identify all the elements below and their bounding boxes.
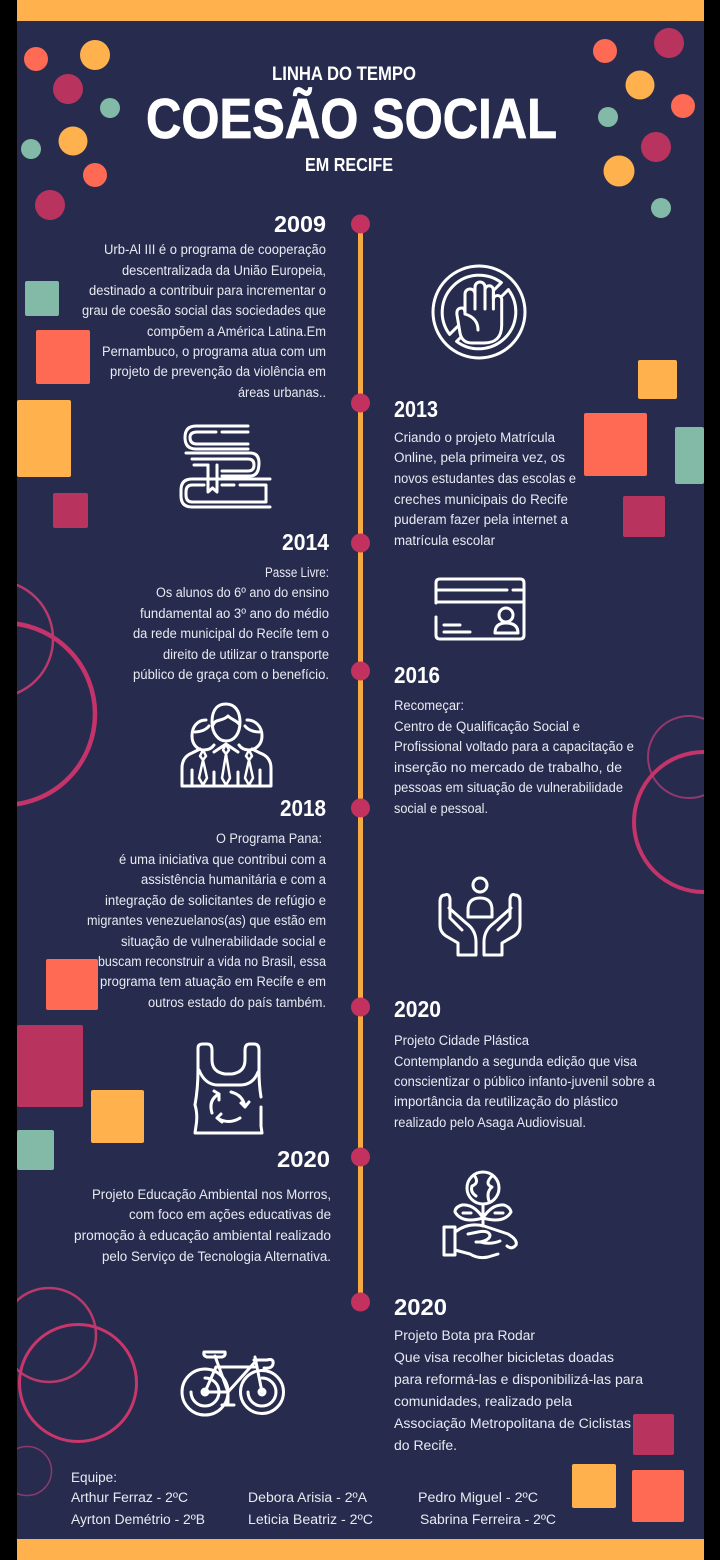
entry 2009: projeto de prevenção da violência em — [110, 364, 326, 379]
bottom orange band — [17, 1539, 704, 1560]
entry 2016: Profissional voltado para a capacitação e — [394, 739, 634, 754]
entry 2020 Cidade Plástica: Projeto Cidade Plástica — [394, 1033, 529, 1048]
entry 2009: Pernambuco, o programa atua com um — [102, 344, 326, 359]
entry 2016: pessoas em situação de vulnerabilidade — [394, 780, 623, 795]
entry 2020 Bota pra Rodar: para reformá-las e disponibilizá-las para — [394, 1372, 643, 1387]
entry 2020 Cidade Plástica: 2020 — [394, 996, 441, 1022]
entry 2020 Educação Ambiental: 2020 — [277, 1146, 330, 1172]
entry 2018: 2018 — [280, 795, 326, 821]
entry 2018: migrantes venezuelanos(as) que estão em — [87, 913, 326, 928]
entry 2020 Cidade Plástica — [394, 996, 655, 1130]
entry 2014: da rede municipal do Recife tem o — [133, 626, 329, 641]
decorative rings bottom left — [2, 1288, 136, 1496]
entry 2020 Bota pra Rodar — [394, 1294, 643, 1453]
entry 2009: 2009 — [274, 211, 326, 237]
entry 2018: situação de vulnerabilidade social e — [121, 934, 326, 949]
entry 2013: Criando o projeto Matrícula — [394, 430, 555, 445]
entry 2016: Centro de Qualificação Social e — [394, 719, 580, 734]
entry 2018: assistência humanitária e com a — [141, 872, 326, 887]
icon: three people — [182, 704, 271, 786]
entry 2020 Educação Ambiental: Projeto Educação Ambiental nos Morros, — [92, 1187, 331, 1202]
entry 2013: creches municipais do Recife — [394, 492, 568, 507]
entry 2014: Os alunos do 6º ano do ensino — [156, 585, 329, 600]
decorative squares lower left — [17, 959, 144, 1170]
entry 2013: 2013 — [394, 396, 438, 422]
decorative squares lower right — [572, 1414, 684, 1522]
icon: hands holding person — [440, 878, 520, 955]
team credits — [71, 1470, 556, 1527]
entry 2020 Educação Ambiental: com foco em ações educativas de — [129, 1207, 331, 1222]
entry 2009: descentralizada da União Europeia, — [122, 263, 326, 278]
entry 2018: buscam reconstruir a vida no Brasil, essa — [98, 954, 326, 969]
entry 2020 Cidade Plástica: importância da reutilização do plástico — [394, 1094, 618, 1109]
entry 2009: Urb-Al III é o programa de cooperação — [104, 242, 326, 257]
entry 2014: público de graça com o benefício. — [133, 667, 329, 682]
entry 2020 Cidade Plástica: conscientizar o público infanto-juvenil sobre a — [394, 1074, 655, 1089]
entry 2016 — [394, 662, 634, 816]
decorative dots left — [21, 40, 120, 220]
entry 2014: 2014 — [282, 529, 329, 555]
entry 2020 Bota pra Rodar: 2020 — [394, 1294, 447, 1320]
team credits: Arthur Ferraz - 2ºC — [71, 1490, 188, 1505]
entry 2016: inserção no mercado de trabalho, de — [394, 760, 622, 775]
icon: bicycle — [182, 1352, 284, 1415]
decorative rings right — [632, 715, 704, 894]
timeline axis — [358, 224, 363, 1298]
entry 2009 — [82, 211, 326, 400]
entry 2018: é uma iniciativa que contribui com a — [119, 852, 326, 867]
entry 2018 — [87, 795, 326, 1010]
icon: plant in hand — [444, 1172, 516, 1258]
entry 2013: novos estudantes das escolas e — [394, 471, 576, 486]
team credits: Debora Arisia - 2ºA — [248, 1490, 367, 1505]
entry 2009: grau de coesão social das sociedades que — [82, 303, 326, 318]
entry 2009: compõem a América Latina.Em — [147, 324, 326, 339]
top orange band — [17, 0, 704, 21]
entry 2014 — [133, 529, 329, 682]
entry 2013: Online, pela primeira vez, os — [394, 450, 565, 465]
entry 2013 — [394, 396, 576, 548]
entry 2016: Recomeçar: — [394, 698, 464, 713]
icon: recycled bag — [195, 1044, 262, 1133]
entry 2016: 2016 — [394, 662, 440, 688]
timeline nodes — [351, 214, 370, 1312]
team credits: Ayrton Demétrio - 2ºB — [71, 1512, 205, 1527]
entry 2020 Educação Ambiental: pelo Serviço de Tecnologia Alternativa. — [102, 1249, 331, 1264]
icon: stop hand — [433, 266, 525, 358]
icon: books — [181, 426, 270, 507]
entry 2018: O Programa Pana: — [216, 831, 322, 846]
entry 2018: outros estado do país também. — [148, 995, 326, 1010]
title: LINHA DO TEMPO — [272, 64, 416, 85]
entry 2014: Passe Livre: — [265, 565, 329, 580]
entry 2020 Cidade Plástica: realizado pelo Asaga Audiovisual. — [394, 1115, 586, 1130]
decorative dots right — [593, 28, 695, 218]
title: COESÃO SOCIAL — [146, 87, 557, 151]
entry 2018: programa tem atuação em Recife e em — [100, 974, 326, 989]
title — [146, 64, 557, 175]
entry 2020 Bota pra Rodar: Associação Metropolitana de Ciclistas — [394, 1416, 631, 1431]
entry 2013: puderam fazer pela internet a — [394, 512, 568, 527]
entry 2014: fundamental ao 3º ano do médio — [140, 606, 329, 621]
decorative squares upper right — [584, 360, 704, 537]
team credits: Leticia Beatriz - 2ºC — [248, 1512, 373, 1527]
team credits: Pedro Miguel - 2ºC — [418, 1490, 538, 1505]
entry 2016: social e pessoal. — [394, 801, 488, 816]
entry 2020 Bota pra Rodar: comunidades, realizado pela — [394, 1394, 572, 1409]
entry 2014: direito de utilizar o transporte — [163, 647, 329, 662]
entry 2018: integração de solicitantes de refúgio e — [105, 893, 326, 908]
team credits: Equipe: — [71, 1470, 117, 1485]
decorative squares upper left — [17, 281, 90, 528]
icon: id card — [436, 579, 524, 639]
entry 2020 Bota pra Rodar: do Recife. — [394, 1438, 457, 1453]
entry 2020 Cidade Plástica: Contemplando a segunda edição que visa — [394, 1054, 637, 1069]
entry 2013: matrícula escolar — [394, 533, 495, 548]
entry 2020 Educação Ambiental: promoção à educação ambiental realizado — [74, 1228, 331, 1243]
team credits: Sabrina Ferreira - 2ºC — [420, 1512, 556, 1527]
entry 2009: destinado a contribuir para incrementar o — [89, 283, 326, 298]
entry 2009: áreas urbanas.. — [238, 385, 326, 400]
entry 2020 Bota pra Rodar: Projeto Bota pra Rodar — [394, 1328, 535, 1343]
entry 2020 Educação Ambiental — [74, 1146, 331, 1264]
title: EM RECIFE — [305, 155, 393, 175]
decorative rings left — [17, 584, 98, 806]
entry 2020 Bota pra Rodar: Que visa recolher bicicletas doadas — [394, 1350, 614, 1365]
